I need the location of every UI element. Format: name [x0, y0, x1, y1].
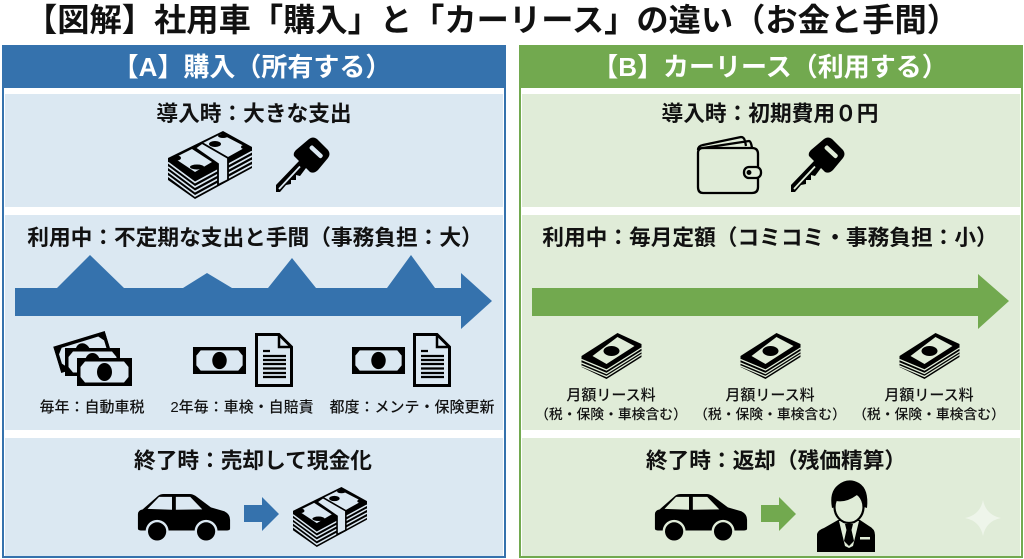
- icon: sparkle watermark: [965, 500, 1001, 536]
- icon: cash stack: [293, 487, 367, 547]
- section: A end: [5, 438, 503, 556]
- heading: A end: 終了時：売却して現金化: [134, 448, 372, 473]
- arrow: flat monthly timeline: [532, 274, 1009, 329]
- icon: bills annual: [53, 331, 132, 386]
- arrow: car to cash: [244, 497, 279, 531]
- label: two-year inspection: 2年毎：車検・自賠責: [170, 399, 314, 416]
- label: maintenance and renewal: 都度：メンテ・保険更新: [329, 399, 495, 416]
- heading: A during use: 利用中：不定期な支出と手間（事務負担：大）: [27, 225, 483, 250]
- icon: person in suit: [817, 480, 875, 552]
- section: B during use: [522, 215, 1020, 430]
- section: B end: [522, 438, 1020, 556]
- section: A during use: [5, 215, 503, 430]
- panel A header: [3, 46, 505, 88]
- icon: bill and document, as needed: [352, 334, 450, 386]
- panel: A purchase: [3, 46, 505, 557]
- panel: B car lease: [520, 46, 1022, 557]
- panel A header: 【A】購入（所有する）: [113, 52, 391, 82]
- icon: car: [655, 494, 747, 543]
- item: monthly fee 1: 月額リース料: [566, 387, 656, 404]
- title: 【図解】社用車「購入」と「カーリース」の違い（お金と手間）: [25, 2, 959, 38]
- heading: B start: 導入時：初期費用０円: [662, 101, 878, 126]
- item: monthly fee 3: （税・保険・車検含む）: [853, 406, 1005, 422]
- section: A start: [5, 94, 503, 207]
- arrow: irregular cost timeline: [15, 255, 492, 329]
- section: B start: [522, 94, 1020, 207]
- icon: key: [276, 138, 330, 192]
- item: monthly fee 1: [535, 333, 687, 422]
- icon: key: [791, 138, 844, 192]
- panel B header: [520, 46, 1022, 88]
- item: monthly fee 3: 月額リース料: [884, 387, 974, 404]
- item: monthly fee 2: [694, 333, 846, 422]
- arrow: car to staff: [761, 497, 796, 531]
- icon: money stack: [168, 131, 252, 199]
- icon: car: [138, 494, 230, 543]
- icon: bill and document, two years: [193, 334, 292, 386]
- item: monthly fee 3: [853, 333, 1005, 422]
- heading: B during use: 利用中：毎月定額（コミコミ・事務負担：小）: [542, 225, 998, 250]
- panel B header: 【B】カーリース（利用する）: [592, 52, 948, 82]
- item: monthly fee 2: 月額リース料: [725, 387, 815, 404]
- label: annual tax: 毎年：自動車税: [39, 399, 145, 416]
- item: monthly fee 1: （税・保険・車検含む）: [535, 406, 687, 422]
- heading: A start: 導入時：大きな支出: [156, 101, 352, 126]
- heading: B end: 終了時：返却（残価精算）: [646, 448, 906, 473]
- item: monthly fee 2: （税・保険・車検含む）: [694, 406, 846, 422]
- icon: wallet: [698, 137, 761, 193]
